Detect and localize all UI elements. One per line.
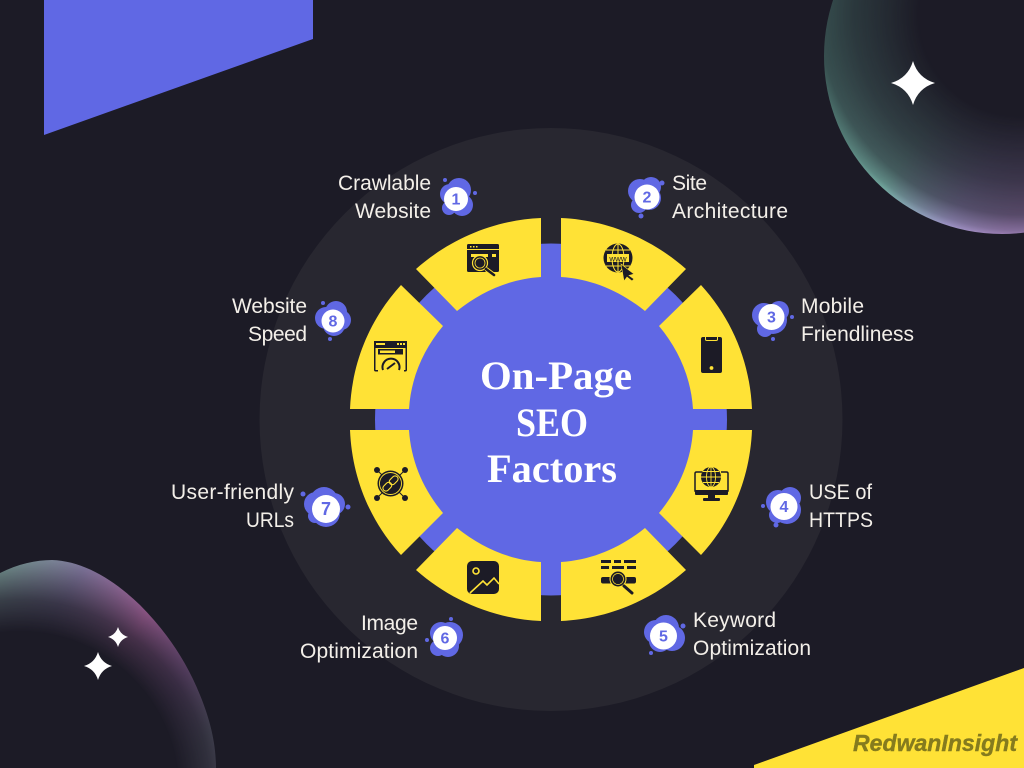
label 8: website speed: [232, 295, 307, 346]
label 7: user-friendly urls: User-friendly: [171, 481, 294, 504]
badge 6: [425, 617, 463, 657]
label 1: crawlable website: [338, 172, 431, 223]
badge 3: 3: [767, 310, 776, 326]
title: Factors: [487, 446, 617, 491]
decorative yellow corner with brand: [754, 668, 1024, 768]
title: [480, 353, 632, 491]
label 7: user-friendly urls: URLs: [246, 509, 294, 532]
badge 1: [440, 178, 477, 216]
label 4: use of https: HTTPS: [809, 509, 873, 532]
decorative bottom-left bubble: [0, 560, 216, 768]
title: SEO: [516, 400, 588, 445]
icon: website speed gauge: [374, 341, 407, 374]
wheel segments: [350, 218, 752, 621]
icon: image: [467, 561, 499, 594]
label 4: use of https: USE of: [809, 481, 872, 504]
label 1: crawlable website: Website: [355, 200, 431, 223]
icon: keyword search: [601, 560, 636, 593]
label 4: use of https: [809, 481, 873, 532]
icon: www globe with cursor: www: [608, 254, 627, 264]
icon: www globe with cursor: [604, 244, 634, 281]
icon: mobile phone: [701, 337, 722, 373]
label 5: keyword optimization: Optimization: [693, 637, 811, 660]
label 6: image optimization: Image: [361, 612, 418, 635]
label 6: image optimization: Optimization: [300, 640, 418, 663]
label 2: site architecture: [672, 172, 788, 223]
label 8: website speed: Speed: [248, 323, 307, 346]
label 8: website speed: Website: [232, 295, 307, 318]
badge 6: 6: [441, 630, 450, 648]
label 3: mobile friendliness: Mobile: [801, 295, 864, 318]
label 3: mobile friendliness: [801, 295, 914, 346]
badge 7: 7: [321, 499, 331, 519]
badge 2: [628, 177, 664, 218]
badge 4: 4: [780, 499, 789, 516]
icon: https monitor with globe: [695, 467, 728, 501]
center blue disc: [375, 244, 727, 596]
label 1: crawlable website: Crawlable: [338, 172, 431, 195]
badge 7: [300, 487, 350, 527]
decorative top-right bubble: [824, 0, 1024, 234]
badge 4: [761, 487, 801, 528]
label 6: image optimization: [300, 612, 418, 663]
icon: crawlable website: [467, 244, 499, 275]
brand name: RedwanInsight: [853, 730, 1018, 756]
label 2: site architecture: Site: [672, 172, 707, 195]
label 7: user-friendly urls: [171, 481, 294, 532]
badge 2: 2: [643, 190, 652, 206]
icon: link with nodes: [374, 467, 408, 501]
label 2: site architecture: Architecture: [672, 200, 788, 223]
outer ring panel: [260, 128, 842, 711]
badge 1: 1: [452, 192, 461, 208]
badge 8: [315, 301, 351, 341]
title: On-Page: [480, 353, 632, 398]
badge 5: [644, 615, 686, 655]
badge 3: [752, 301, 794, 341]
label 5: keyword optimization: Keyword: [693, 609, 776, 632]
decorative purple corner shape: [44, 0, 313, 135]
label 5: keyword optimization: [693, 609, 811, 660]
badge 5: 5: [659, 628, 668, 646]
badge 8: 8: [329, 314, 338, 330]
label 3: mobile friendliness: Friendliness: [801, 323, 914, 346]
